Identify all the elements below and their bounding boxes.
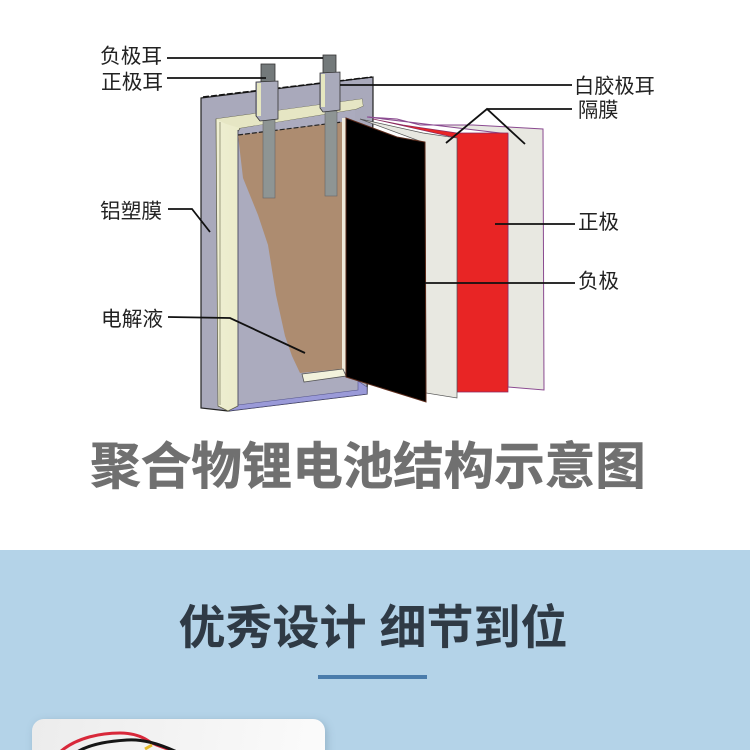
back white separator sheet [367,117,544,390]
left tab: positive [256,64,278,121]
battery structure diagram [100,45,655,412]
product photo card [32,719,325,750]
diagram title: 聚合物锂电池结构示意图 [90,438,646,495]
label: negative electrode: 负极 [578,270,619,293]
label: electrolyte: 电解液 [101,308,163,331]
heading underline [318,675,427,679]
label: white glue tab: 白胶极耳 [574,75,655,98]
label: positive tab: 正极耳 [101,71,163,94]
electrolyte brown area [238,122,342,373]
label: negative tab: 负极耳 [100,45,162,68]
section heading: 优秀设计 细节到位 [178,601,568,654]
current collector strips [263,111,337,198]
icon: battery wires [60,732,176,750]
label: positive electrode: 正极 [578,211,619,234]
front white separator sheet [360,119,457,398]
label: aluminium-plastic film: 铝塑膜 [100,200,162,223]
right tab: negative [320,55,340,112]
black negative electrode sheet [346,118,426,402]
cream sealing frame [216,99,363,411]
red positive electrode sheet [373,119,508,392]
electrolyte top shadow [238,122,342,135]
inner right frame edge [342,118,346,372]
bottom inner bracket [302,369,346,382]
leader lines [167,58,575,353]
aluminium-plastic film back panel [201,77,373,411]
panel: blue design section [0,550,750,750]
label: separator: 隔膜 [578,99,618,122]
